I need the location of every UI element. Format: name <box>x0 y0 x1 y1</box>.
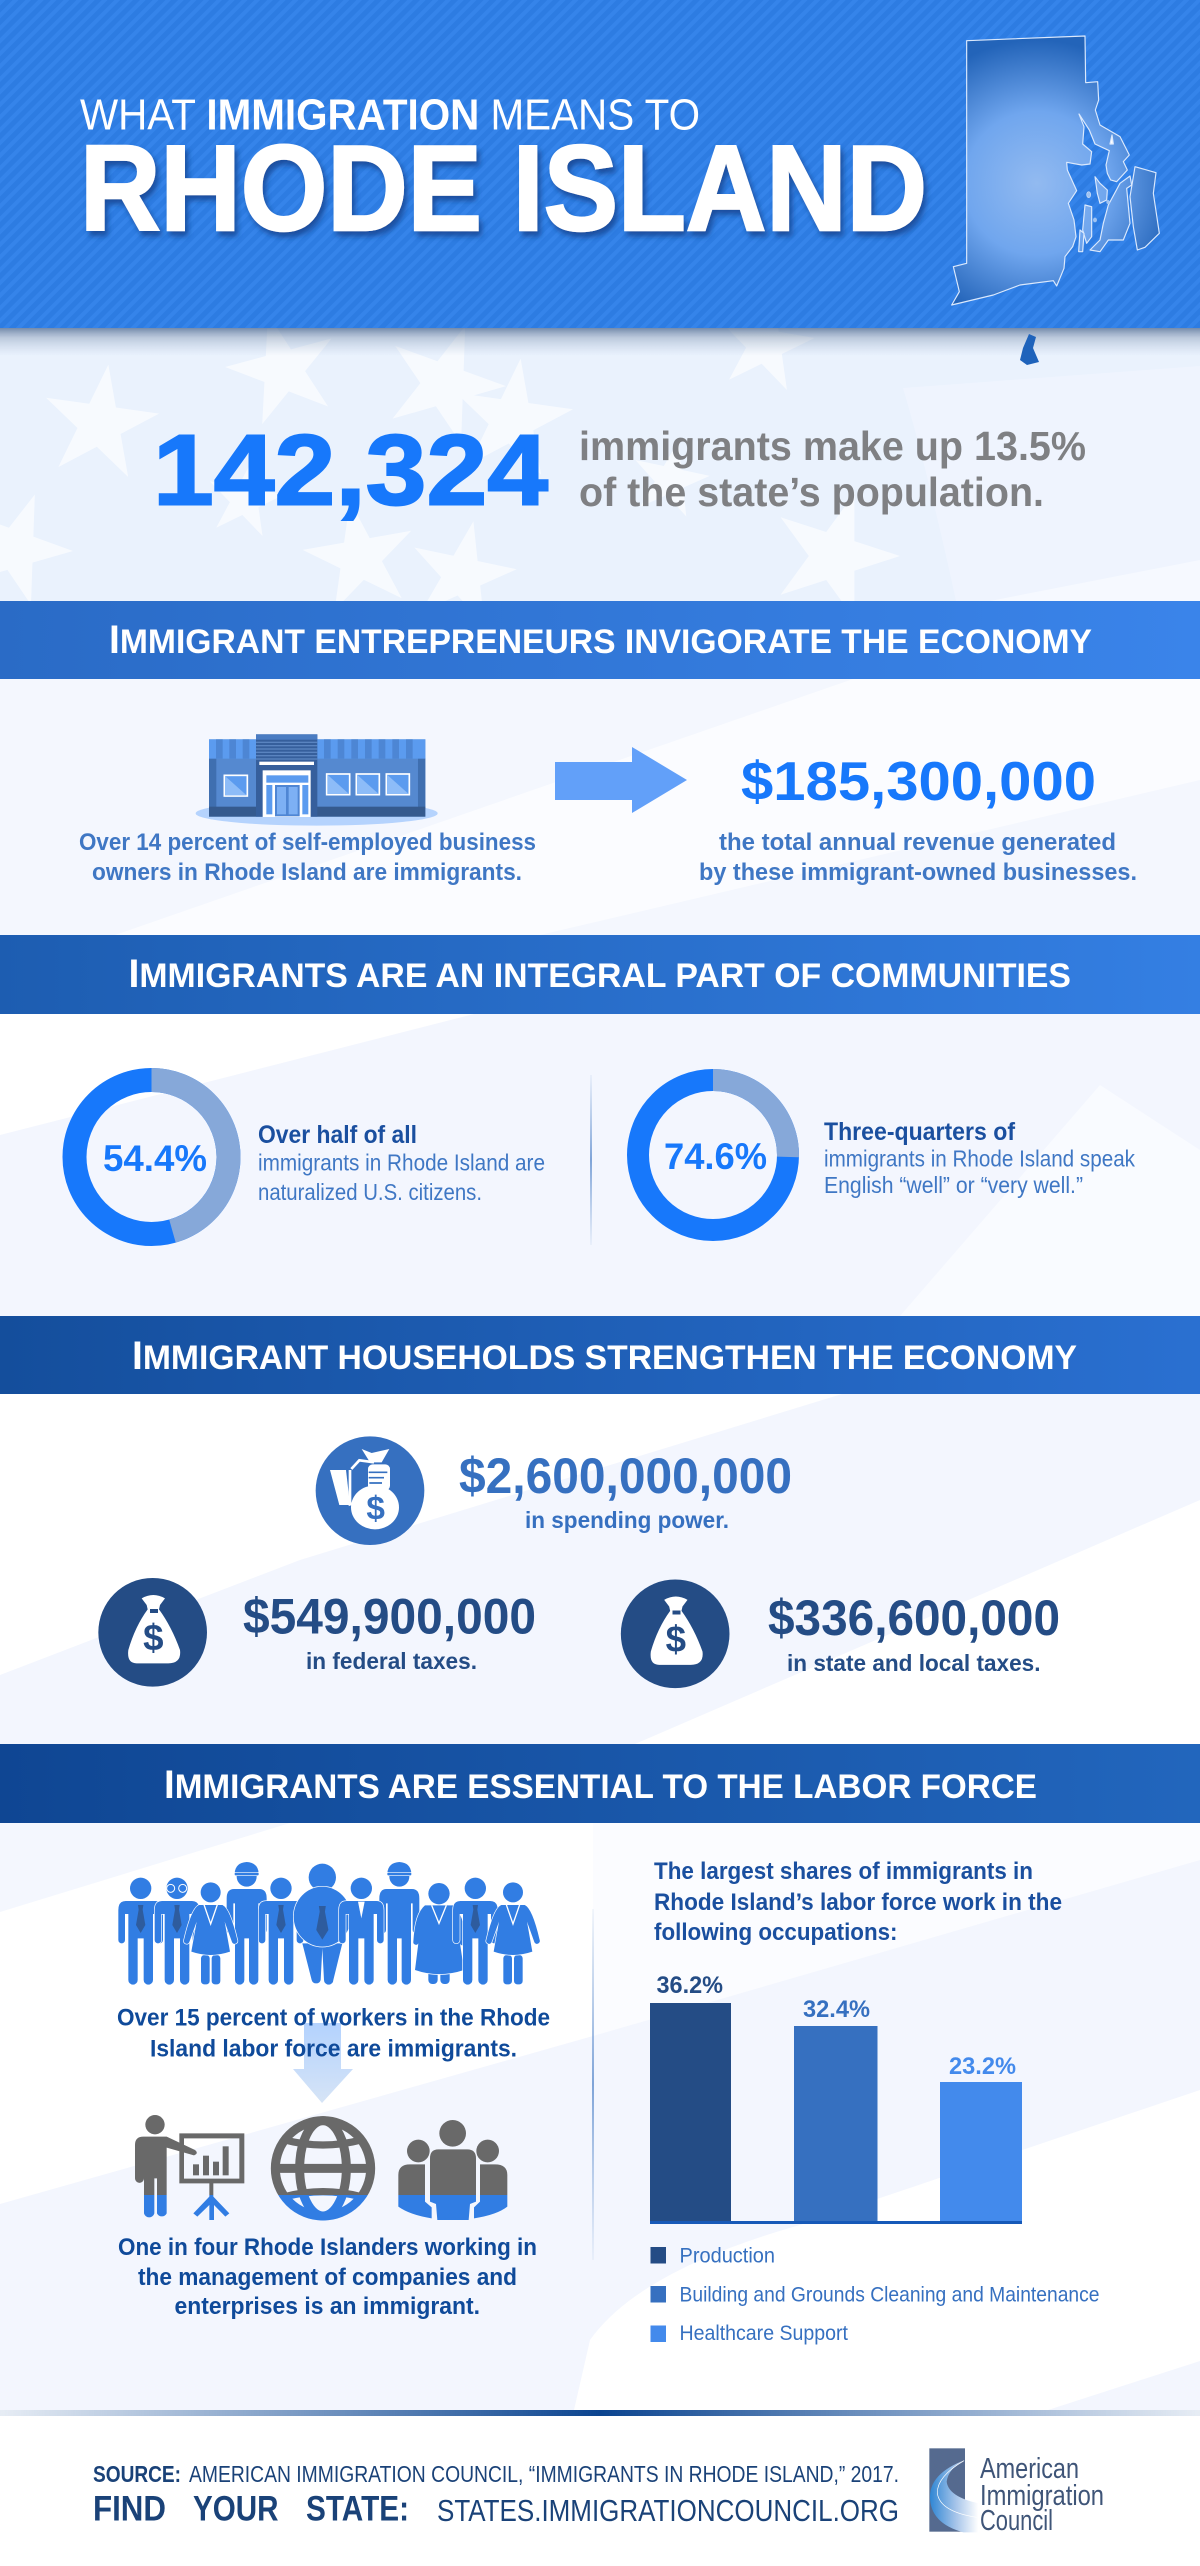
text: naturalized citizens <box>258 1121 545 1205</box>
icon: storefront <box>196 734 438 826</box>
heading bar: households <box>0 1316 1200 1394</box>
text: English speakers: immigrants in Rhode Island speak <box>824 1146 1135 1172</box>
icon: money bag state <box>621 1579 729 1688</box>
bar chart <box>650 1972 1022 2224</box>
text: source: AMERICAN IMMIGRATION COUNCIL, “IMMIGRANTS IN RHODE ISLAND,” 2017. <box>189 2461 899 2487</box>
text: find your state: YOUR <box>193 2490 278 2529</box>
panel: labor force left <box>117 1862 550 2320</box>
text: immigrants share: immigrants make up 13.5% <box>579 423 1086 469</box>
panel: header banner <box>0 0 1200 365</box>
heading bar: labor force: IMMIGRANTS ARE ESSENTIAL TO THE LABOR FORCE <box>164 1763 1037 1807</box>
title: what immigration means to: WHAT IMMIGRATION MEANS TO <box>80 90 700 140</box>
heading bar: communities: IMMIGRANTS ARE AN INTEGRAL PART OF COMMUNITIES <box>128 952 1071 996</box>
bar chart: 32.4% <box>803 1996 870 2023</box>
donut chart: 74.6%: 74.6% <box>664 1136 767 1177</box>
logo: American Immigration Council <box>929 2448 1104 2537</box>
bar chart: 23.2% <box>949 2053 1016 2080</box>
donut chart: 54.4%: 54.4% <box>103 1138 207 1179</box>
heading bar: labor force <box>0 1744 1200 1823</box>
number: spending power: $2,600,000,000 <box>459 1448 792 1504</box>
icon: map of Rhode Island <box>952 36 1159 305</box>
logo: American Immigration Council: American <box>980 2453 1079 2485</box>
number: federal taxes: $549,900,000 <box>243 1588 536 1644</box>
panel: entrepreneurs content <box>79 734 1137 886</box>
icons: management row <box>135 2115 507 2220</box>
text: federal taxes caption: in federal taxes. <box>306 1648 477 1674</box>
text: self-employed owners: owners in Rhode Island are immigrants. <box>92 859 522 886</box>
text: spending power caption: in spending power. <box>525 1507 729 1533</box>
text: revenue caption <box>699 829 1137 886</box>
panel: population statistic <box>153 414 1086 526</box>
donut chart: 54.4% <box>74 1080 228 1234</box>
logo: American Immigration Council: Council <box>980 2505 1053 2537</box>
text: revenue caption: by these immigrant-owned businesses. <box>699 859 1137 886</box>
legend: Production <box>680 2244 775 2268</box>
text: English speakers: Three-quarters of <box>824 1118 1016 1146</box>
text: English speakers <box>824 1118 1135 1198</box>
text: workers share: Island labor force are immigrants. <box>150 2036 517 2063</box>
text: chart heading: The largest shares of immigrants in <box>654 1858 1033 1885</box>
number: 142,324: 142,324 <box>153 414 548 526</box>
text: management share: enterprises is an immigrant. <box>174 2293 480 2320</box>
text: state and local taxes caption: in state and local taxes. <box>787 1650 1040 1676</box>
text: chart heading: Rhode Island’s labor force work in the <box>654 1889 1062 1916</box>
panel: communities content <box>74 1075 1135 1245</box>
icon: money bag federal <box>98 1578 207 1687</box>
heading bar: households: IMMIGRANT HOUSEHOLDS STRENGTHEN THE ECONOMY <box>132 1334 1077 1378</box>
arrow: down <box>293 2023 353 2103</box>
icon: team <box>398 2120 507 2220</box>
icon: presenter <box>135 2115 244 2220</box>
bar chart: 36.2% <box>656 1972 723 1999</box>
text: immigrants share <box>579 423 1086 515</box>
text: find your state: STATE: <box>306 2490 409 2529</box>
text: find your state <box>93 2490 409 2529</box>
text: management share <box>118 2234 537 2320</box>
text: website: STATES.IMMIGRATIONCOUNCIL.ORG <box>437 2493 899 2528</box>
icon: globe <box>275 2121 371 2216</box>
heading bar: entrepreneurs: IMMIGRANT ENTREPRENEURS INVIGORATE THE ECONOMY <box>109 618 1092 662</box>
text: naturalized citizens: naturalized U.S. citizens. <box>258 1179 482 1205</box>
number: state and local taxes: $336,600,000 <box>768 1590 1060 1646</box>
icon: group of workers <box>118 1862 540 1985</box>
heading bar: communities <box>0 935 1200 1014</box>
legend: Building and Grounds Cleaning and Maintenance <box>680 2284 1100 2306</box>
text: naturalized citizens: Over half of all <box>258 1121 417 1149</box>
text: management share: One in four Rhode Islanders working in <box>118 2234 537 2261</box>
text: find your state: FIND <box>93 2490 166 2529</box>
text: naturalized citizens: immigrants in Rhode Island are <box>258 1150 545 1176</box>
number: revenue: $185,300,000 <box>741 750 1096 812</box>
icon: hand holding money bag <box>316 1436 424 1545</box>
text: workers share <box>117 2005 550 2063</box>
text: self-employed owners <box>79 829 536 886</box>
donut chart: 74.6% <box>638 1080 788 1230</box>
text: chart heading <box>654 1858 1062 1946</box>
icon: money bag federal: $ <box>143 1617 164 1658</box>
icon: hand holding money bag: $ <box>366 1490 385 1527</box>
legend: Healthcare Support <box>680 2322 848 2345</box>
text: management share: the management of companies and <box>138 2264 517 2291</box>
logo: American Immigration Council: Immigration <box>980 2480 1104 2512</box>
panel: footer <box>93 2448 1104 2537</box>
text: workers share: Over 15 percent of workers in the Rhode <box>117 2005 550 2032</box>
panel: occupations chart <box>650 1858 1100 2345</box>
text: English speakers: English “well” or “very well.” <box>824 1172 1083 1198</box>
text: source label: SOURCE: <box>93 2461 181 2487</box>
legend <box>650 2244 1100 2345</box>
text: revenue caption: the total annual revenue generated <box>719 829 1116 856</box>
text: self-employed owners: Over 14 percent of self-employed business <box>79 829 536 856</box>
heading bar: entrepreneurs <box>0 601 1200 679</box>
title: Rhode Island: RHODE ISLAND <box>80 120 927 256</box>
icon: money bag state: $ <box>666 1618 686 1659</box>
arrow: to revenue <box>555 747 687 813</box>
icon: Block Island <box>1020 334 1039 365</box>
panel: households content <box>98 1436 1060 1688</box>
text: chart heading: following occupations: <box>654 1919 898 1946</box>
text: immigrants share: of the state’s population. <box>579 469 1044 515</box>
